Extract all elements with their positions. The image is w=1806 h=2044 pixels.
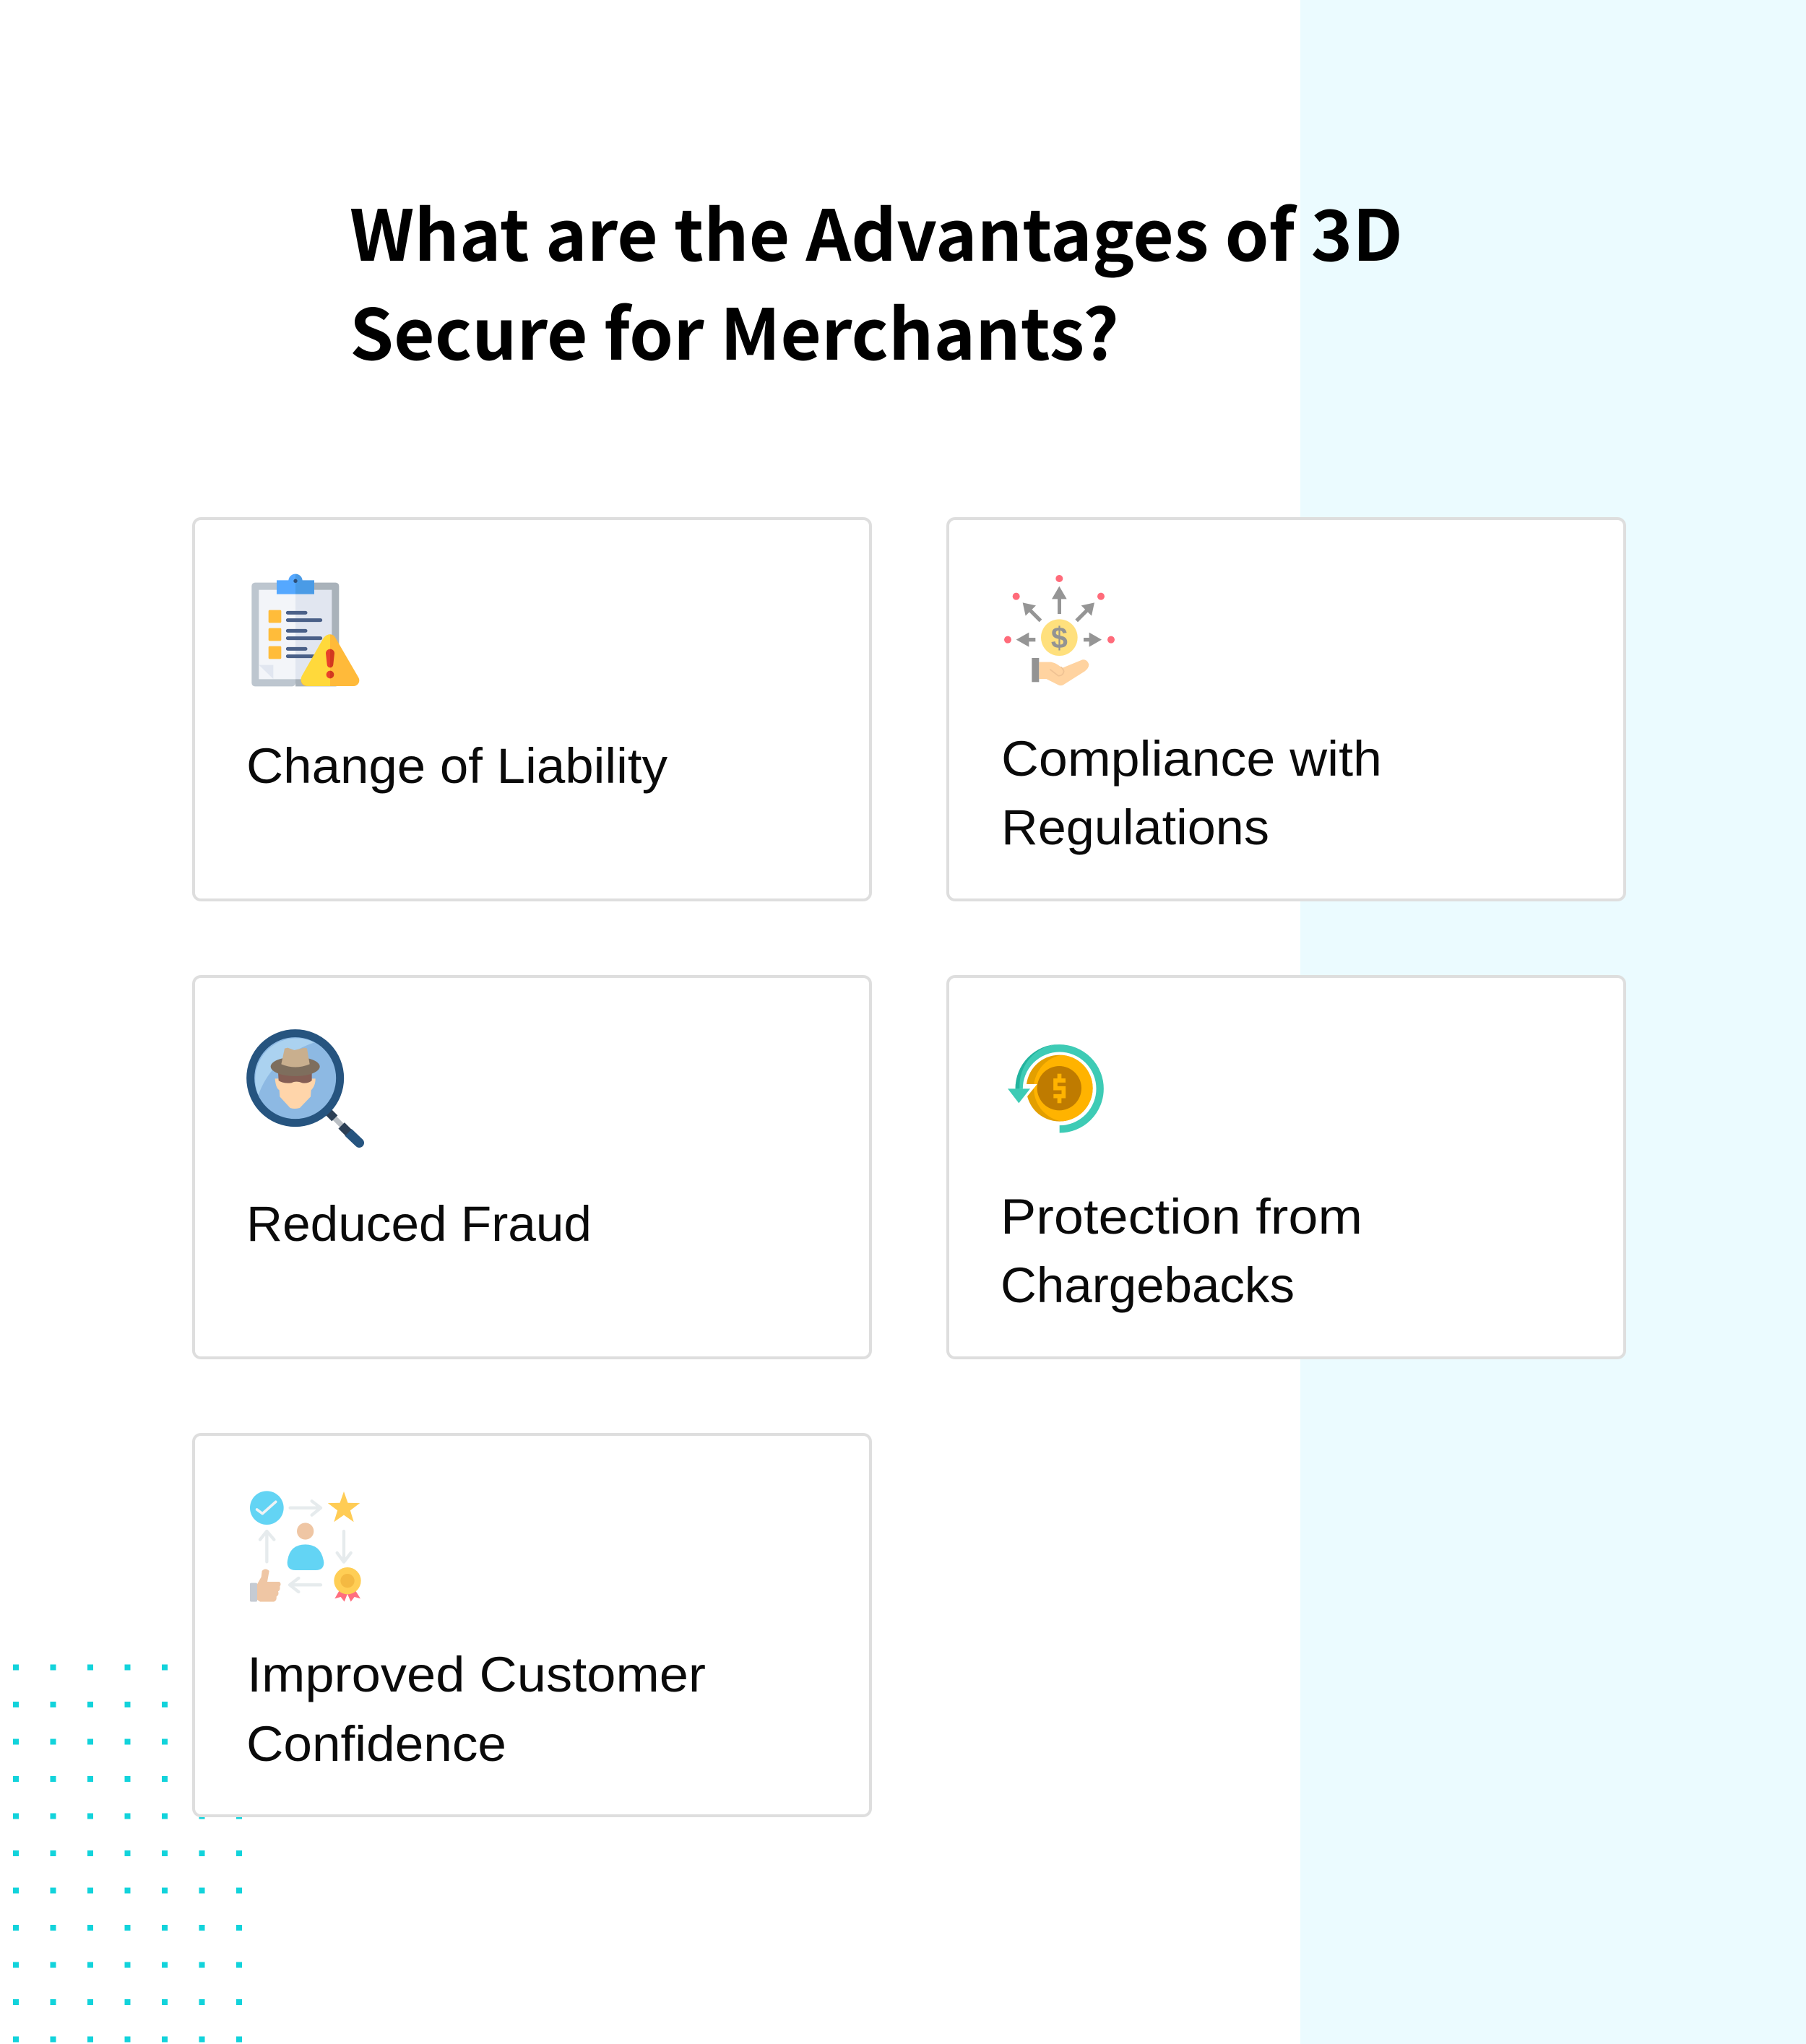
- label: Change of Liability: [246, 738, 668, 794]
- icon: clipboard with warning: [251, 574, 353, 686]
- label: Reduced Fraud: [246, 1196, 592, 1252]
- dot pattern: [13, 1664, 273, 2044]
- icon: magnifier with spy: [251, 1034, 359, 1143]
- label: Confidence: [246, 1716, 506, 1772]
- icon: coin with return arrow: [1008, 1044, 1101, 1129]
- background panel: [1300, 0, 1806, 2044]
- panel: compliance with regulations: [948, 519, 1625, 900]
- label: Regulations: [1001, 800, 1269, 855]
- title: What are the Advantages of 3D: [350, 179, 1403, 281]
- panel: change of liability: [194, 519, 870, 900]
- label: Protection from: [1001, 1189, 1362, 1244]
- panel: reduced fraud: [194, 976, 870, 1358]
- panel: protection from chargebacks: [948, 976, 1625, 1358]
- title: [350, 179, 1403, 380]
- icon: customer cycle: [250, 1491, 361, 1602]
- label: Chargebacks: [1001, 1257, 1295, 1313]
- icon: coin on hand with arrows: $: [1051, 621, 1068, 654]
- icon: coin on hand with arrows: [1004, 575, 1115, 685]
- label: Improved Customer: [247, 1647, 706, 1702]
- panel: improved customer confidence: [194, 1434, 870, 1816]
- title: Secure for Merchants?: [350, 278, 1119, 380]
- label: Compliance with: [1001, 731, 1382, 787]
